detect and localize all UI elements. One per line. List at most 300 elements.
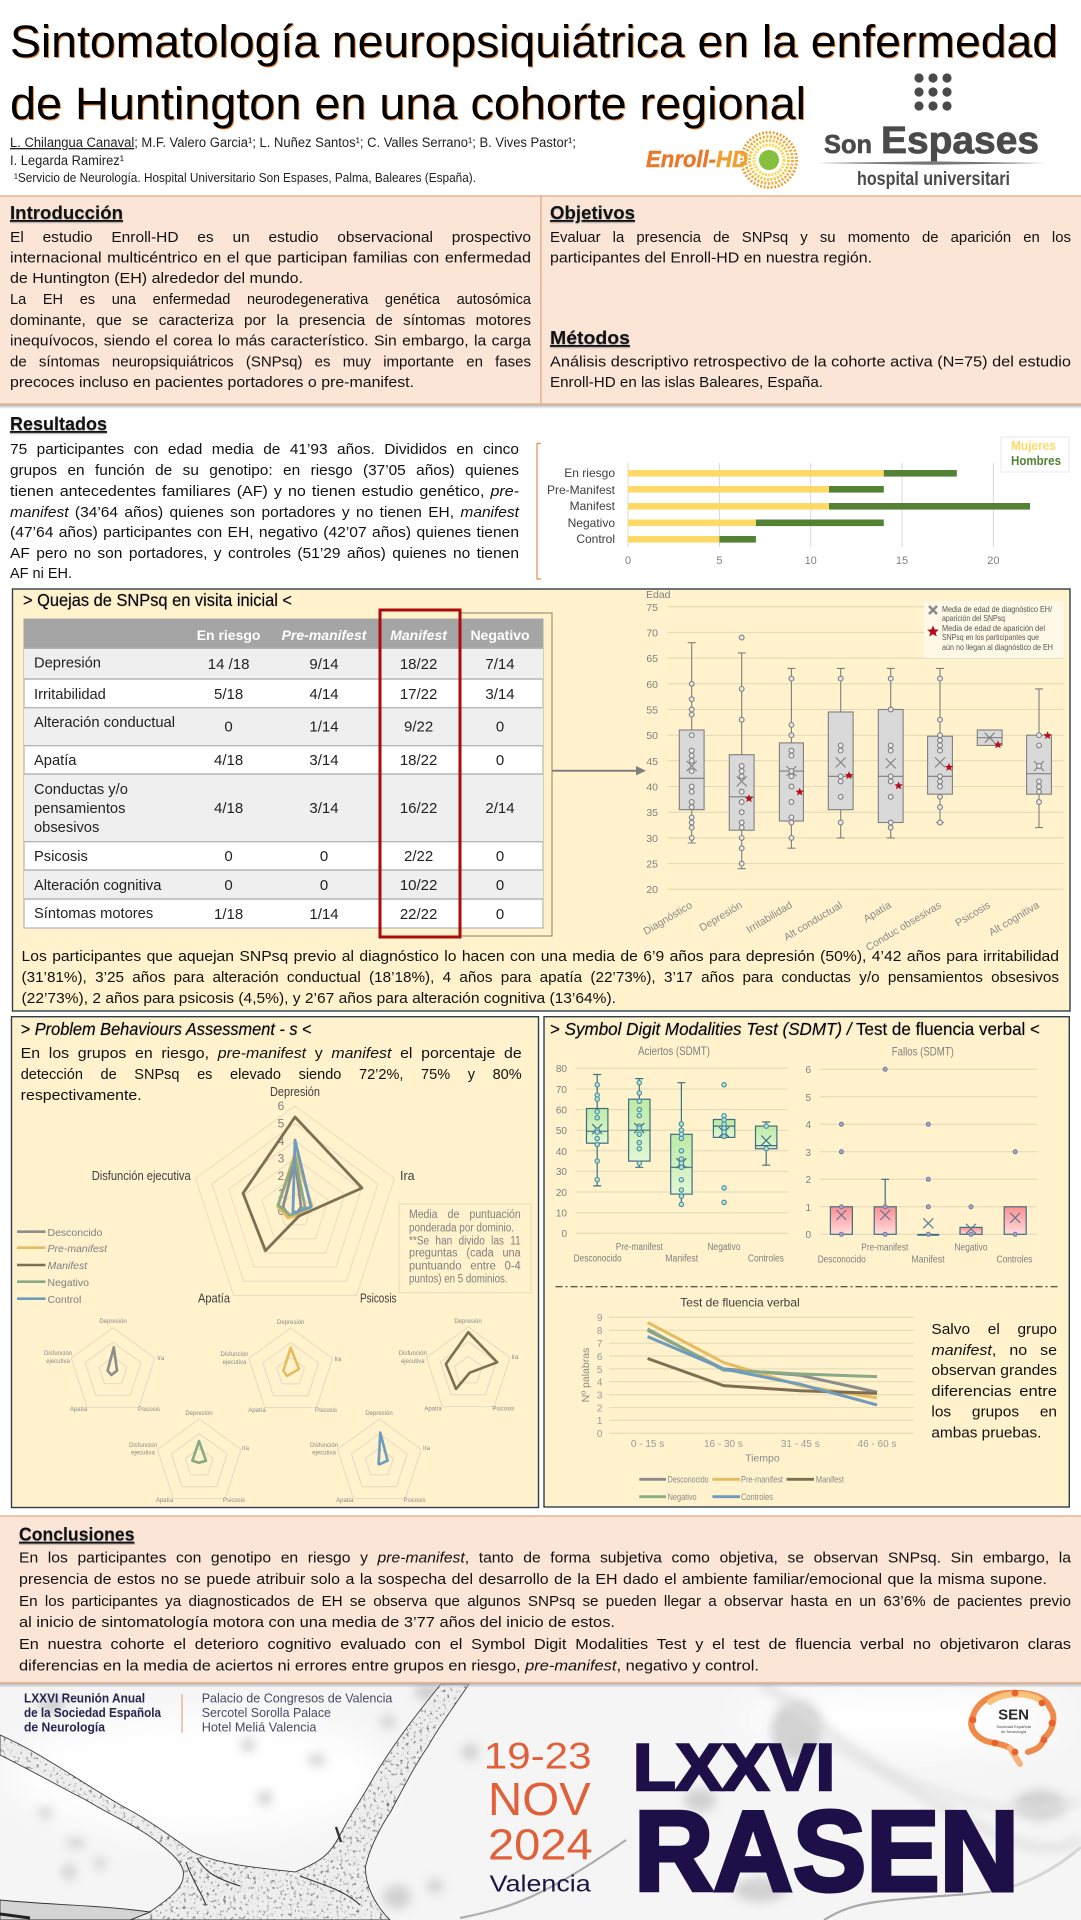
box plot: edad: 45 [646, 756, 658, 768]
illustration: neuron [0, 1684, 1081, 1920]
row: alteración conductual: 0 [224, 719, 233, 736]
footer: fecha [484, 1735, 593, 1897]
footer: sedes: Palacio de Congresos de Valencia [202, 1691, 393, 1706]
box: alt cognitiva [1027, 689, 1051, 828]
box plot: edad: 55 [646, 704, 658, 716]
bar chart: sexo por grupo: Manifest [570, 499, 616, 513]
text: métodos [550, 354, 1071, 391]
row: apatía [34, 752, 504, 769]
small radar: manifest: ejecutiva [401, 1359, 425, 1365]
legend: fluencia: Desconocido [668, 1474, 709, 1486]
line chart: fluencia verbal: 4 [597, 1378, 603, 1388]
text: conclusiones [19, 1550, 1072, 1675]
bar chart: sexo por grupo [547, 437, 1069, 567]
bar chart: sexo por grupo: 15 [896, 555, 908, 567]
text: aparición previa al diagnóstico: (22’73%), 2 años para psicosis (4,5%), y 2’67 años para alteración cognitiva (13’64%). [22, 990, 616, 1007]
text: introducción: El estudio Enroll-HD es un estudio observacional prospectivo [10, 229, 531, 246]
text: PBA: detección de SNPsq es elevado siendo 72’2%, 75% y 80% [21, 1066, 522, 1083]
small radar: control: ejecutiva [312, 1450, 336, 1456]
authors [10, 135, 576, 185]
box plot: aciertos SDMT: 70 [556, 1085, 567, 1096]
table frame [460, 613, 552, 936]
row: conductas obsesivas: pensamientos [34, 801, 125, 817]
text: interpretación: manifest , no se [931, 1342, 1057, 1359]
x axis labels: Alt conductual [782, 899, 845, 944]
radar chart: all groups: 4 [278, 1134, 285, 1148]
note: puntuación: puntuando entre 0-4 [409, 1260, 521, 1272]
row: conductas obsesivas: 4/18 [214, 800, 243, 817]
footer: LXXVI RASEN [633, 1730, 1019, 1916]
box plot: fallos SDMT: 4 [805, 1120, 811, 1131]
small radar: control: Disfunción [310, 1443, 338, 1449]
box plot: edad: 30 [646, 833, 658, 845]
legend: box plot: Media de edad de aparición del [942, 623, 1045, 633]
bar chart: sexo por grupo: Control [576, 532, 615, 546]
text: introducción: de síntomas neuropsiquiátricos (SNPsq) es muy importante en fases [10, 354, 531, 370]
row: conductas obsesivas: obsesivos [34, 820, 99, 836]
row: depresión: 7/14 [485, 656, 515, 673]
text: interpretación: observan grandes [931, 1362, 1057, 1379]
row: irritabilidad: 3/14 [485, 686, 515, 703]
row: síntomas motores: 1/18 [214, 906, 243, 923]
line chart: fluencia verbal: 46 - 60 s [858, 1439, 896, 1450]
text: interpretación: ambas pruebas. [931, 1425, 1041, 1442]
panel: quejas de SNPsq [12, 589, 1070, 1011]
legend: fluencia: Manifest [816, 1474, 844, 1486]
small radar: pre-manifest: Ira [334, 1357, 342, 1363]
x axis labels: Alt cognitiva [987, 899, 1042, 939]
footer: sedes [202, 1691, 393, 1735]
row: alteración conductual [24, 708, 543, 746]
box plot: edad: 35 [646, 807, 658, 819]
legend: radar: Manifest [48, 1260, 88, 1272]
box plot: edad: 25 [646, 858, 658, 870]
text: introducción: internacional multicéntrico en el que participan familias con enfermedad [10, 250, 531, 266]
small radar: manifest [399, 1319, 519, 1412]
box: conductas obsesivas [928, 668, 952, 825]
row: alteración cognitiva: 0 [320, 877, 328, 894]
text: resultados: (47’64 años) participantes con EH, negativo (42’07 años) quienes tienen [10, 524, 519, 541]
small radar: desconocido: ejecutiva [46, 1359, 70, 1365]
legend: radar: Pre-manifest [48, 1243, 108, 1255]
box plot: aciertos SDMT [556, 1044, 788, 1265]
bar chart: sexo por grupo: En riesgo [564, 466, 615, 480]
text: introducción: de Huntington (EH) alrededor del mundo. [10, 270, 303, 287]
heading: quejas: > Quejas de SNPsq en visita inicial < [23, 590, 292, 610]
text: conclusiones: En los participantes ya diagnosticados de EH se observa que algunos SNPsq se pueden llegar a observar hasta en un 63’6% de pacientes previo [19, 1593, 1071, 1610]
panel shadow [0, 404, 1081, 409]
text: interpretación [931, 1321, 1057, 1442]
box plot: aciertos SDMT: Aciertos (SDMT) [638, 1044, 710, 1058]
small radar: negativo: Disfunción [129, 1443, 157, 1449]
note: puntuación: **Se han divido las 11 [409, 1235, 521, 1247]
small radar: negativo: Depresión [185, 1411, 213, 1417]
authors: ¹Servicio de Neurología. Hospital Universitario Son Espases, Palma, Baleares (España). [14, 171, 476, 185]
logo: Son Espases: Son [824, 129, 872, 159]
row: irritabilidad [34, 686, 515, 703]
small radar: pre-manifest: ejecutiva [223, 1360, 247, 1366]
table: quejas por grupo [24, 619, 543, 928]
box plot: aciertos SDMT: 80 [556, 1064, 567, 1075]
table header: Negativo [470, 627, 530, 643]
row: depresión: 14 /18 [208, 656, 249, 673]
x axis labels: Conduc obsesivas [864, 899, 944, 954]
table header [24, 619, 543, 648]
small radar: desconocido: Apatía [70, 1407, 88, 1413]
small radar: manifest: Psicosis [492, 1406, 514, 1412]
x axis labels: Diagnóstico [641, 899, 695, 938]
box plot: aciertos SDMT: Controles [748, 1254, 784, 1265]
row: depresión [24, 648, 543, 679]
row: síntomas motores: Síntomas motores [34, 906, 153, 922]
text: objetivos: Evaluar la presencia de SNPsq y su momento de aparición en los [550, 229, 1071, 246]
footer: LXXVI RASEN: RASEN [634, 1788, 1019, 1916]
footer: sedes: Hotel Meliá Valencia [202, 1720, 317, 1735]
x axis labels: Depresión [697, 899, 745, 934]
legend: fluencia: Pre-manifest [741, 1474, 783, 1486]
row: alteración cognitiva: 0 [224, 877, 233, 894]
box plot: fallos SDMT: 6 [805, 1065, 811, 1076]
row: alteración cognitiva [24, 870, 543, 899]
title: Sintomatología neuropsiquiátrica en la enfermedad [10, 16, 1058, 67]
box plot: fallos SDMT: 1 [805, 1203, 811, 1214]
row: conductas obsesivas [24, 774, 543, 842]
box: psicosis [977, 730, 1002, 745]
legend: box plot [924, 601, 1064, 658]
small radar: control: Depresión [365, 1411, 393, 1417]
box plot: edad: 20 [646, 884, 658, 896]
row: síntomas motores: 0 [496, 906, 504, 923]
text: interpretación: los grupos en [931, 1404, 1057, 1421]
logo: Son Espases: hospital universitari [857, 169, 1010, 190]
legend: box plot: SNPsq en los participantes que [942, 632, 1039, 642]
row: irritabilidad: 5/18 [214, 686, 243, 703]
text: resultados: manifest (34’64 años) quienes son portadores y no tienen EH, manifest [10, 504, 520, 521]
box plot: aciertos SDMT: 30 [556, 1167, 567, 1178]
panel: conclusiones [0, 1516, 1081, 1683]
row: irritabilidad: Irritabilidad [34, 687, 106, 703]
row: síntomas motores: 1/14 [309, 906, 339, 923]
small radar: control: Apatía [336, 1498, 354, 1504]
text: introducción [10, 229, 532, 391]
line chart: fluencia verbal: Nº palabras [580, 1348, 592, 1402]
line chart: fluencia verbal: 0 - 15 s [631, 1439, 664, 1450]
line chart: fluencia verbal: 1 [597, 1416, 603, 1427]
heading: resultados: Resultados [10, 414, 107, 434]
box plot: edad: 40 [646, 782, 658, 794]
row: alteración cognitiva: 0 [496, 877, 504, 894]
title: de Huntington en una cohorte regional [10, 78, 806, 129]
box plot: fallos SDMT: 5 [805, 1093, 811, 1104]
legend: radar: Control [48, 1294, 81, 1306]
line chart: fluencia verbal: Tiempo [745, 1453, 780, 1465]
heading: SDMT: > Symbol Digit Modalities Test (SDMT) / Test de fluencia verbal < [550, 1019, 1040, 1039]
box plot: aciertos SDMT: 50 [556, 1126, 567, 1137]
legend: fluencia [639, 1474, 844, 1503]
line chart: fluencia verbal: 31 - 45 s [781, 1439, 820, 1450]
x axis labels [641, 899, 1042, 954]
x axis labels: Psicosis [953, 899, 993, 929]
heading: introducción: Introducción [10, 203, 123, 223]
radar chart: all groups: 3 [278, 1152, 285, 1166]
row: apatía: 0 [496, 752, 504, 769]
box plot: aciertos SDMT: 20 [556, 1188, 567, 1199]
text: conclusiones: diferencias en la media de aciertos ni errores entre grupos en riesgo, pre-manifest , negativo y control. [19, 1658, 759, 1675]
text: conclusiones: al inicio de sintomatología motora con una media de 3’77 años del inicio de estos. [19, 1614, 615, 1631]
logo: Enroll-HD: Enroll-HD [646, 146, 748, 172]
row: psicosis: 0 [320, 848, 328, 865]
radar chart: all groups: Disfunción ejecutiva [92, 1169, 191, 1183]
radar chart: all groups: Apatía [198, 1292, 230, 1306]
red star markers [745, 731, 1052, 802]
small radar: desconocido: Ira [157, 1356, 165, 1362]
footer: reunión anual [24, 1691, 162, 1735]
text: introducción: La EH es una enfermedad neurodegenerativa genética autosómica [10, 291, 532, 308]
box plot: aciertos SDMT: Desconocido [574, 1254, 622, 1265]
box plot: edad: 75 [646, 602, 658, 614]
small radar: negativo: ejecutiva [131, 1450, 156, 1456]
text: resultados: tienen antecedentes familiares (AF) y no tienen estudio genético, pre- [10, 483, 519, 500]
line chart: fluencia verbal: 8 [597, 1326, 603, 1337]
small radar: manifest: Depresión [454, 1319, 482, 1325]
legend: radar: Desconcido [48, 1227, 103, 1239]
text: interpretación: Salvo el grupo [931, 1321, 1057, 1338]
text: introducción: inequívocos, siendo el corea lo más característico. Sin embargo, la carga [10, 332, 532, 350]
highlight: manifest column [380, 610, 460, 937]
small radar: desconocido: Depresión [99, 1319, 127, 1325]
row: alteración cognitiva: Alteración cognitiva [34, 878, 162, 894]
line chart: fluencia verbal: 9 [597, 1313, 603, 1324]
text: aparición previa al diagnóstico: (31’81%), 3’25 años para alteración conductual (18’18%), 4 años para apatía (22’73%), 3’17 años para conductas y/o pensamientos obsesivos [22, 969, 1059, 986]
heading: PBA: > Problem Behaviours Assessment - s < [21, 1019, 312, 1039]
heading: conclusiones: Conclusiones [19, 1525, 134, 1545]
row: síntomas motores [34, 906, 504, 923]
row: apatía: 18/22 [400, 752, 437, 769]
line chart: fluencia verbal: 0 [597, 1429, 603, 1440]
authors: I. Legarda Ramirez¹ [10, 153, 124, 168]
panel: problem behaviours assessment [12, 1017, 538, 1508]
box plot: fallos SDMT [805, 1045, 1037, 1266]
footer: fecha: NOV [488, 1773, 591, 1825]
radar chart: all groups: 0 [278, 1204, 285, 1218]
authors: L. Chilangua Canaval; M.F. Valero Garcia¹; L. Nuñez Santos¹; C. Valles Serrano¹; B. Vives Pastor¹; [10, 135, 576, 150]
footer: reunión anual: de la Sociedad Española [24, 1705, 162, 1720]
bar chart: sexo por grupo: Negativo [568, 516, 615, 530]
text: aparición previa al diagnóstico: Los participantes que aquejan SNPsq previo al diagnóstico lo hacen con una media de 6’9 años para depresión (50%), 4’42 años para irritabilidad [22, 948, 1059, 965]
radar chart: all groups: 2 [278, 1169, 285, 1183]
bar chart: sexo por grupo: 10 [805, 555, 817, 567]
title [10, 16, 1058, 129]
row: conductas obsesivas: 3/14 [309, 800, 339, 817]
footer: reunión anual: de Neurología [24, 1720, 106, 1735]
table header: Pre-manifest [282, 627, 368, 643]
row: conductas obsesivas: 2/14 [485, 800, 515, 817]
radar chart: all groups: 5 [278, 1116, 285, 1130]
line chart: fluencia verbal: 7 [597, 1339, 603, 1350]
small radar: pre-manifest: Apatía [248, 1408, 266, 1414]
note: puntuación: Media de puntuación [409, 1209, 521, 1221]
footer: LXXVI RASEN: LXXVI [633, 1730, 835, 1804]
row: psicosis: Psicosis [34, 849, 88, 865]
text: resultados: grupos en función de su genotipo: en riesgo (37’05 años) quienes [10, 462, 519, 479]
text: resultados: AF ni EH. [10, 565, 72, 582]
logo: SEN [970, 1690, 1055, 1764]
footer: fecha: Valencia [490, 1871, 591, 1897]
heading: métodos: Métodos [550, 328, 630, 348]
small radar: pre-manifest [220, 1320, 342, 1414]
row: alteración conductual: Alteración conductual [34, 715, 175, 731]
box: irritabilidad [779, 668, 803, 848]
legend: sexo [1001, 437, 1069, 472]
radar chart: all groups: 1 [278, 1186, 285, 1200]
legend: box plot: aparición del SNPsq [942, 613, 1005, 623]
footer: reunión anual: LXXVI Reunión Anual [24, 1691, 145, 1706]
box plot: edad: 70 [646, 628, 658, 640]
small radar: manifest: Apatía [424, 1406, 442, 1412]
text: métodos: Enroll-HD en las islas Baleares, España. [550, 374, 823, 391]
box plot: fallos SDMT: Desconocido [818, 1255, 866, 1266]
text: interpretación: diferencias entre [931, 1383, 1057, 1400]
small radar: control: Psicosis [403, 1498, 426, 1504]
legend: sexo: Hombres [1011, 454, 1061, 468]
line chart: fluencia verbal: 2 [597, 1404, 603, 1414]
text: aparición previa al diagnóstico [22, 948, 1059, 1007]
logo: SEN: SEN [998, 1706, 1029, 1723]
small radar: control: Ira [423, 1446, 431, 1452]
row: alteración cognitiva: 10/22 [400, 877, 437, 894]
box plot: aciertos SDMT: 60 [556, 1106, 567, 1116]
small radar: pre-manifest: Psicosis [315, 1408, 337, 1414]
box plot: aciertos SDMT: Manifest [665, 1254, 698, 1265]
row: apatía: 3/14 [309, 752, 339, 769]
text: PBA: En los grupos en riesgo, pre-manifest y manifest el porcentaje de [21, 1045, 522, 1062]
row: depresión: 18/22 [400, 656, 437, 673]
small radar: desconocido: Disfunción [44, 1351, 72, 1357]
box plot: edad: Edad [646, 589, 671, 601]
radar chart: all groups: Psicosis [360, 1292, 396, 1306]
text: introducción: dominante, que se caracteriza por la presencia de síntomas motores [10, 312, 531, 329]
small radar: manifest: Ira [511, 1355, 519, 1361]
box plot: fallos SDMT: Fallos (SDMT) [892, 1045, 954, 1059]
radar chart: all groups: Depresión [270, 1085, 320, 1099]
row: psicosis [34, 848, 504, 865]
row: alteración conductual: 0 [496, 719, 504, 736]
line chart: fluencia verbal [580, 1296, 914, 1503]
row: apatía: Apatía [34, 753, 77, 769]
small radar: pre-manifest: Depresión [277, 1320, 304, 1326]
small radar: negativo: Psicosis [223, 1498, 245, 1504]
legend: radar: Negativo [48, 1277, 89, 1289]
small radar: pre-manifest: Disfunción [220, 1352, 249, 1358]
box plot: edad [641, 589, 1064, 954]
logo: Son Espases [817, 73, 1045, 190]
row: síntomas motores: 22/22 [400, 906, 437, 923]
box plot: fallos SDMT: 3 [805, 1148, 811, 1159]
box plot: aciertos SDMT: 40 [556, 1147, 567, 1158]
text: conclusiones: presencia de estos no se puede atribuir solo a la sospecha del desarrollo de la EH dado el ambiente familiar/emocional que la misma supone. [19, 1571, 1047, 1588]
line chart: fluencia verbal: 16 - 30 s [704, 1439, 743, 1450]
panel: SDMT y fluencia verbal [544, 1017, 1069, 1507]
text: PBA: respectivamente. [21, 1087, 142, 1104]
text: conclusiones: En los participantes con genotipo en riesgo y pre-manifest , tanto de forma subjetiva como objetiva, se observan SNPsq. Sin embargo, la [19, 1550, 1072, 1567]
small radar: desconocido [44, 1319, 165, 1413]
radar chart: all groups: Ira [400, 1169, 415, 1183]
radar chart: all groups [92, 1085, 415, 1306]
box: depresión [729, 635, 754, 869]
box plot: aciertos SDMT: 10 [556, 1208, 567, 1220]
text: resultados [10, 441, 520, 582]
row: psicosis: 0 [224, 848, 233, 865]
bar chart: sexo por grupo: Pre-Manifest [547, 483, 616, 497]
text: objetivos [550, 229, 1071, 266]
box plot: aciertos SDMT: Negativo [708, 1242, 741, 1253]
row: apatía: 4/18 [214, 752, 243, 769]
text: conclusiones: En nuestra cohorte el deterioro cognitivo evaluado con el Symbol Digit Modalities Test y el test de fluencia verbal no objetivaron claras [19, 1636, 1071, 1653]
panel shadow [0, 1683, 1081, 1688]
text: resultados: 75 participantes con edad media de 41’93 años. Divididos en cinco [10, 441, 519, 458]
row: irritabilidad: 17/22 [400, 686, 437, 703]
row: conductas obsesivas: Conductas y/o [34, 782, 128, 798]
line chart: fluencia verbal: 6 [597, 1352, 603, 1363]
legend: sexo: Mujeres [1011, 439, 1056, 453]
row: irritabilidad: 4/14 [309, 686, 339, 703]
legend: box plot: Media de edad de diagnóstico EH/ [942, 604, 1053, 614]
note: puntuación: puntos) en 5 dominios. [409, 1274, 508, 1286]
radar chart: all groups: 6 [278, 1099, 285, 1113]
small radar: manifest: Disfunción [399, 1351, 427, 1357]
box plot: edad: 60 [646, 679, 658, 691]
panel: introducción [0, 196, 541, 404]
logo: Enroll-HD [646, 132, 796, 188]
x axis labels: Apatía [861, 899, 894, 925]
row: depresión: Depresión [34, 656, 101, 672]
table header: En riesgo [197, 627, 260, 643]
legend: radar [17, 1227, 108, 1306]
box: diagnóstico [679, 643, 704, 843]
panel: objetivos y métodos [541, 196, 1081, 404]
box plot: fallos SDMT: 2 [805, 1175, 811, 1186]
box plot: aciertos SDMT: 0 [561, 1229, 567, 1240]
x axis labels: Irritabilidad [744, 899, 795, 936]
footer: sedes: Sercotel Sorolla Palace [202, 1705, 331, 1720]
row: alteración conductual: 9/22 [404, 719, 433, 736]
small radar: negativo [129, 1411, 250, 1504]
box plot: aciertos SDMT: Pre-manifest [616, 1242, 663, 1253]
footer: fecha: 19-23 [484, 1735, 592, 1776]
row: psicosis: 0 [496, 848, 504, 865]
box plot: edad: 50 [646, 730, 658, 742]
table header: Manifest [390, 627, 448, 643]
logo: SEN: Sociedad Española [996, 1724, 1032, 1729]
line chart: fluencia verbal: 3 [597, 1390, 603, 1402]
small radar: control [310, 1411, 431, 1504]
row: psicosis: 2/22 [404, 848, 433, 865]
text: introducción: precoces incluso en pacientes portadores o pre-manifest. [10, 374, 414, 391]
arrow [552, 766, 646, 775]
box plot: fallos SDMT: Manifest [912, 1255, 945, 1266]
line chart: fluencia verbal: 5 [597, 1365, 603, 1376]
legend: box plot: aún no llegan al diagnóstico de EH [942, 642, 1053, 652]
box plot: edad: 65 [646, 653, 658, 665]
box: apatía [878, 668, 903, 838]
logo: Son Espases: Espases [881, 120, 1039, 162]
line chart: fluencia verbal: Test de fluencia verbal [680, 1296, 800, 1310]
box plot: fallos SDMT: Negativo [954, 1243, 988, 1254]
logo: SEN: de Neurología [1001, 1729, 1027, 1734]
note: puntuación: preguntas (cada una [409, 1248, 521, 1260]
heading: objetivos: Objetivos [550, 203, 635, 223]
small radar: desconocido: Psicosis [138, 1407, 160, 1413]
